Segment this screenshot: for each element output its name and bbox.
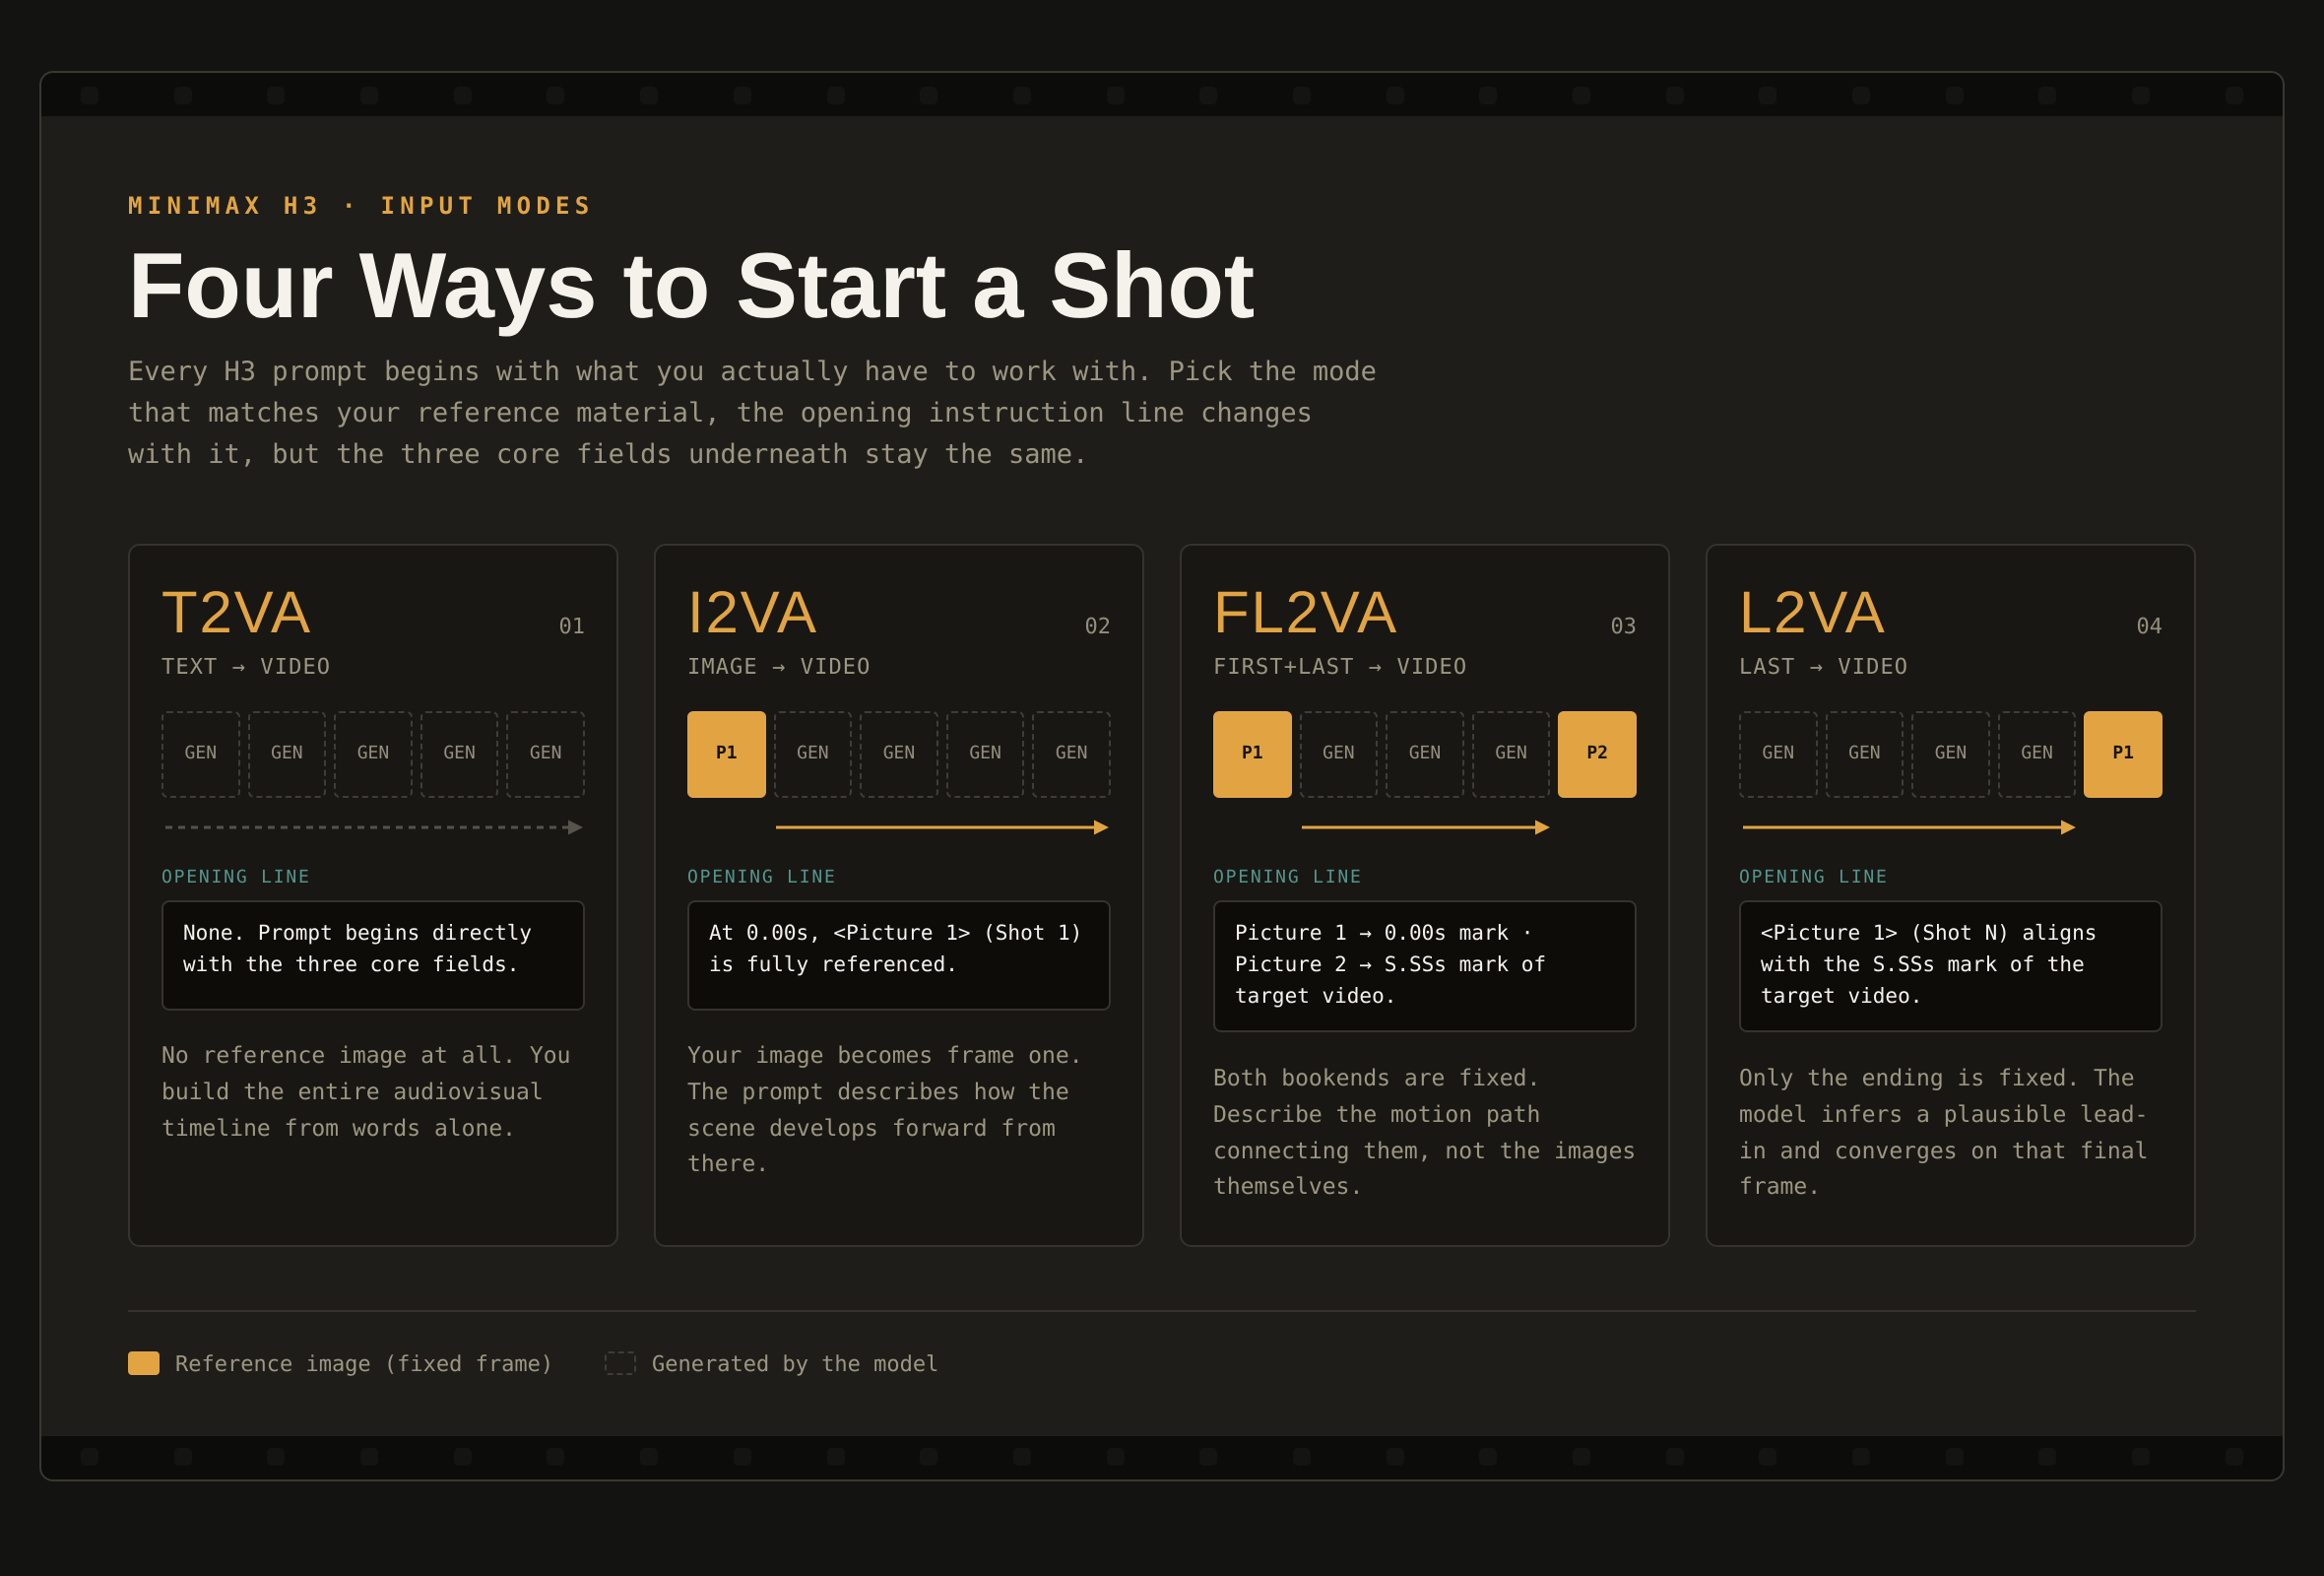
description bbox=[161, 1043, 570, 1142]
frame strip bbox=[687, 711, 1111, 798]
frame strip: GEN bbox=[883, 743, 915, 762]
opening line box: At 0.00s, <Picture 1> (Shot 1) bbox=[709, 921, 1082, 945]
description: Both bookends are fixed. bbox=[1213, 1066, 1540, 1091]
subtitle: Every H3 prompt begins with what you actually have to work with. Pick the mode bbox=[128, 357, 1377, 387]
legend text: reference: Reference image (fixed frame) bbox=[175, 1352, 553, 1377]
arrow: dashed timeline bbox=[165, 820, 583, 835]
frame strip: GEN bbox=[969, 743, 1001, 762]
panel: L2VA bbox=[1706, 544, 2196, 1247]
opening line box: Picture 2 → S.SSs mark of bbox=[1235, 952, 1546, 976]
panel: FL2VA bbox=[1180, 544, 1670, 1247]
description: No reference image at all. You bbox=[161, 1043, 570, 1069]
legend text: generated: Generated by the model bbox=[652, 1352, 938, 1377]
frame strip bbox=[1213, 711, 1637, 798]
arrow: timeline bbox=[776, 820, 1109, 835]
description bbox=[687, 1043, 1083, 1177]
frame strip: GEN bbox=[2021, 743, 2053, 762]
frame strip bbox=[1739, 711, 2163, 798]
frame strip: GEN bbox=[1935, 743, 1967, 762]
description bbox=[1739, 1066, 2148, 1200]
frame strip: P1 bbox=[1242, 743, 1263, 762]
frame strip: GEN bbox=[1763, 743, 1794, 762]
description: The prompt describes how the bbox=[687, 1080, 1069, 1105]
frame strip: GEN bbox=[185, 743, 217, 762]
frame strip: GEN bbox=[1409, 743, 1441, 762]
opening line label: OPENING LINE bbox=[1213, 867, 1363, 886]
opening line box: Picture 1 → 0.00s mark · bbox=[1235, 921, 1533, 945]
opening line box: <Picture 1> (Shot N) aligns bbox=[1761, 921, 2097, 945]
frame strip: GEN bbox=[1495, 743, 1527, 762]
frame strip: P1 bbox=[2112, 743, 2134, 762]
mode number: 04 bbox=[2137, 615, 2163, 638]
mode number: 02 bbox=[1085, 615, 1111, 638]
title: Four Ways to Start a Shot bbox=[128, 233, 1255, 337]
description: frame. bbox=[1739, 1174, 1821, 1200]
opening line box: with the S.SSs mark of the bbox=[1761, 952, 2085, 976]
eyebrow: MINIMAX H3 · INPUT MODES bbox=[128, 191, 595, 219]
description: in and converges on that final bbox=[1739, 1139, 2148, 1164]
frame strip: GEN bbox=[530, 743, 561, 762]
subtitle: with it, but the three core fields underneath stay the same. bbox=[128, 439, 1088, 470]
description: timeline from words alone. bbox=[161, 1116, 516, 1142]
mode subtitle: LAST → VIDEO bbox=[1739, 655, 1908, 680]
legend swatch: generated bbox=[605, 1351, 636, 1375]
mode number: 03 bbox=[1611, 615, 1637, 638]
frame strip: GEN bbox=[443, 743, 476, 762]
mode subtitle: IMAGE → VIDEO bbox=[687, 655, 871, 680]
description bbox=[1213, 1066, 1636, 1200]
frame strip: GEN bbox=[1323, 743, 1355, 762]
description: Describe the motion path bbox=[1213, 1102, 1540, 1128]
description: Only the ending is fixed. The bbox=[1739, 1066, 2135, 1091]
frame strip: GEN bbox=[1056, 743, 1087, 762]
opening line label: OPENING LINE bbox=[161, 867, 311, 886]
opening line label: OPENING LINE bbox=[1739, 867, 1889, 886]
frame strip: GEN bbox=[357, 743, 389, 762]
mode name: L2VA bbox=[1739, 579, 1887, 645]
frame strip: GEN bbox=[1848, 743, 1881, 762]
opening line box: target video. bbox=[1235, 984, 1396, 1008]
opening line box: with the three core fields. bbox=[183, 952, 519, 976]
opening line box: target video. bbox=[1761, 984, 1922, 1008]
mode subtitle: FIRST+LAST → VIDEO bbox=[1213, 655, 1467, 680]
arrow: timeline bbox=[1743, 820, 2076, 835]
top film strip bbox=[41, 73, 2283, 116]
frame strip bbox=[161, 711, 585, 798]
opening line box bbox=[1213, 900, 1637, 1032]
description: model infers a plausible lead- bbox=[1739, 1102, 2148, 1128]
opening line box: is fully referenced. bbox=[709, 952, 958, 976]
mode number: 01 bbox=[559, 615, 585, 638]
opening line box bbox=[1739, 900, 2163, 1032]
panel: T2VA bbox=[128, 544, 618, 1247]
description: scene develops forward from bbox=[687, 1116, 1056, 1142]
opening line box bbox=[687, 900, 1111, 1011]
description: Your image becomes frame one. bbox=[687, 1043, 1083, 1069]
opening line box: None. Prompt begins directly bbox=[183, 921, 532, 945]
panel: I2VA bbox=[654, 544, 1144, 1247]
bottom film strip bbox=[41, 1436, 2283, 1479]
mode name: FL2VA bbox=[1213, 579, 1398, 645]
legend swatch: reference bbox=[128, 1351, 160, 1375]
description: build the entire audiovisual bbox=[161, 1080, 544, 1105]
subtitle bbox=[128, 357, 1377, 470]
mode name: T2VA bbox=[161, 579, 312, 645]
mode name: I2VA bbox=[687, 579, 818, 645]
frame strip: GEN bbox=[271, 743, 303, 762]
description: connecting them, not the images bbox=[1213, 1139, 1636, 1164]
mode subtitle: TEXT → VIDEO bbox=[161, 655, 331, 680]
frame strip: P2 bbox=[1586, 743, 1608, 762]
subtitle: that matches your reference material, the opening instruction line changes bbox=[128, 398, 1313, 428]
frame strip: GEN bbox=[797, 743, 829, 762]
frame strip: P1 bbox=[716, 743, 738, 762]
description: there. bbox=[687, 1151, 769, 1177]
opening line label: OPENING LINE bbox=[687, 867, 837, 886]
description: themselves. bbox=[1213, 1174, 1363, 1200]
arrow: timeline bbox=[1302, 820, 1550, 835]
opening line box bbox=[161, 900, 585, 1011]
